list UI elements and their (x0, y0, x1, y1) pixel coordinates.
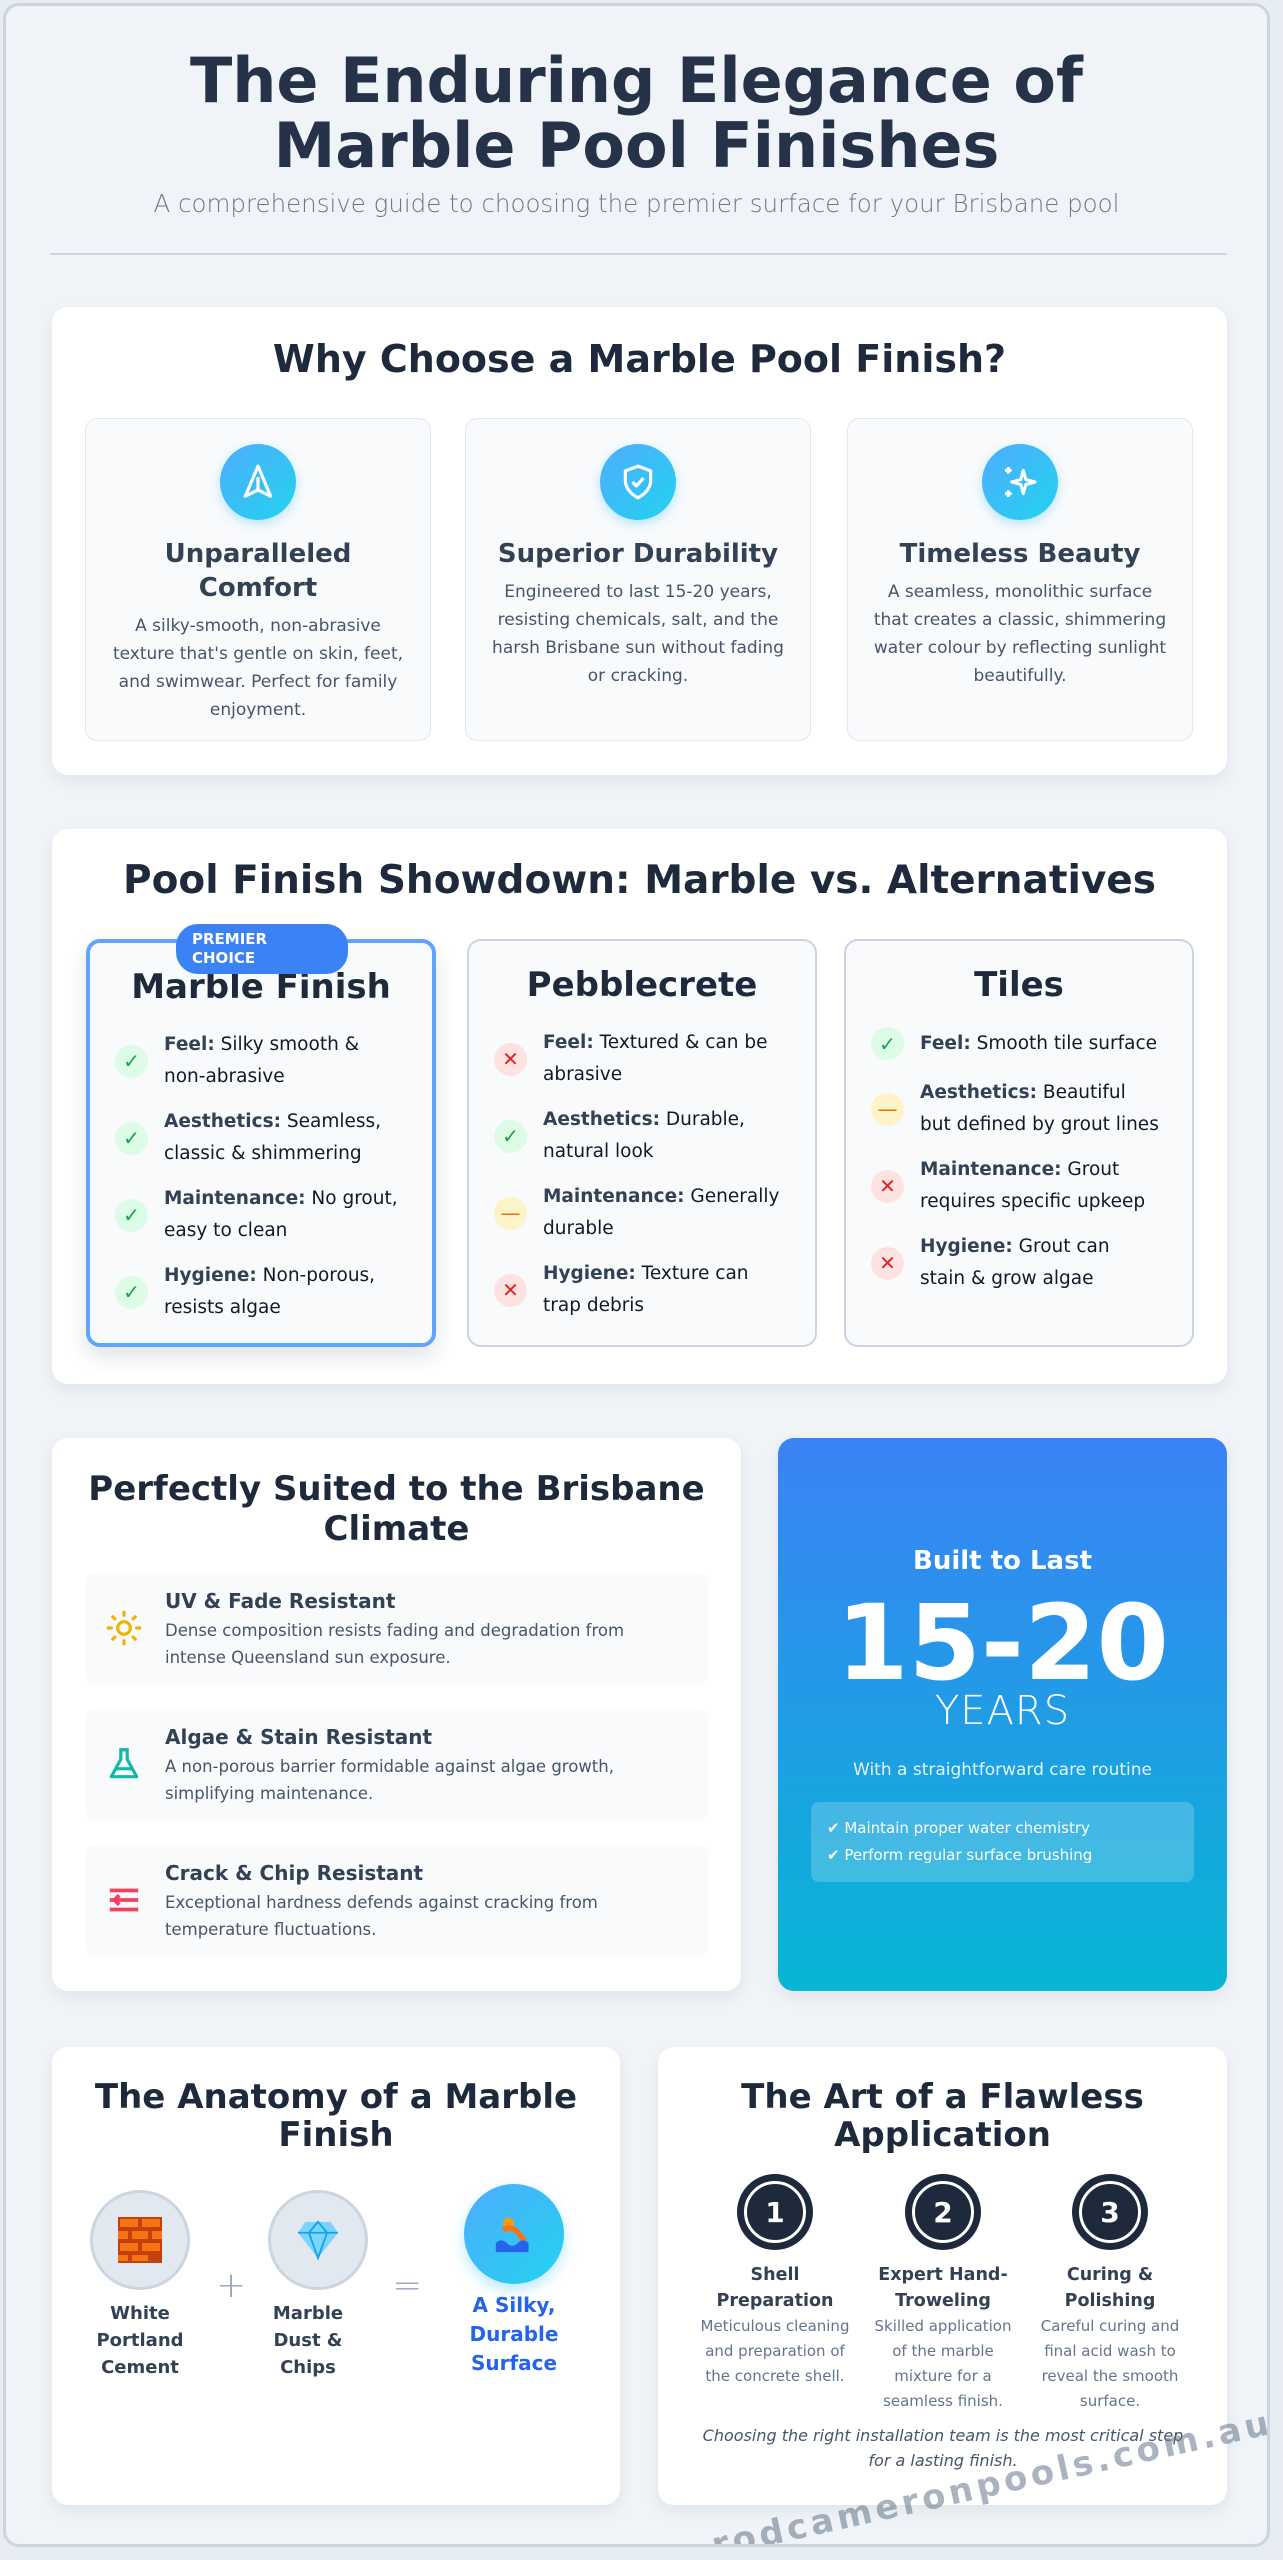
title: The Enduring Elegance of (190, 44, 1083, 117)
card: durability (465, 418, 811, 741)
heading: climate: Climate (324, 1509, 469, 1549)
operator: plus: + (216, 2265, 246, 2306)
column: pebblecrete: Aesthetics: Durable, natural look (543, 1109, 745, 1162)
icon: navigation (220, 444, 296, 520)
panel: built to last: YEARS (935, 1688, 1070, 1734)
column: marble: ✓ (123, 1049, 140, 1073)
panel: brisbane climate (52, 1438, 741, 1991)
box: care checklist (811, 1802, 1194, 1882)
column: tiles: Maintenance: Grout requires specific upkeep (920, 1159, 1145, 1212)
card: beauty (847, 418, 1193, 741)
step 3 (1041, 2174, 1179, 2410)
column: pebblecrete: Hygiene: Texture can trap debris (543, 1263, 749, 1316)
column: pebblecrete: Feel: Textured & can be abrasive (543, 1032, 768, 1085)
step 3: Curing & Polishing (1065, 2265, 1155, 2311)
box: care checklist: ✔ Perform regular surface brushing (827, 1846, 1092, 1864)
feature: algae: A non-porous barrier formidable against algae growth, simplifying maintenance. (165, 1757, 614, 1803)
badge: premier choice: CHOICE (192, 949, 255, 967)
column: tiles: — (878, 1097, 898, 1121)
feature: UV (85, 1573, 708, 1685)
feature: crack: Exceptional hardness defends against cracking from temperature fluctuations. (165, 1893, 598, 1939)
column: pebblecrete: ✓ (502, 1124, 519, 1148)
heading: application: The Art of a Flawless (741, 2077, 1144, 2117)
step 2: Skilled application of the marble mixture for a seamless finish. (874, 2317, 1011, 2410)
label: marble dust: Marble Dust & Chips (273, 2303, 343, 2378)
card: beauty: Timeless Beauty (900, 539, 1140, 569)
icon: flask (110, 1748, 138, 1778)
icon: layers (110, 1888, 138, 1912)
column: marble: Marble Finish (131, 967, 391, 1007)
column: pebblecrete: ✕ (502, 1278, 519, 1302)
column: pebblecrete (467, 939, 817, 1347)
card: durability: Engineered to last 15-20 years, resisting chemicals, salt, and the harsh Brisbane sun without fading or cracking. (492, 582, 784, 686)
label: result: A Silky, Durable Surface (470, 2293, 558, 2375)
card: comfort (85, 418, 431, 741)
circle: result surface (464, 2184, 564, 2284)
step 2: 2 (933, 2196, 953, 2228)
feature: UV: UV & Fade Resistant (165, 1589, 395, 1613)
badge: premier choice: PREMIER (192, 930, 267, 948)
subtitle: A comprehensive guide to choosing the premier surface for your Brisbane pool (154, 189, 1119, 218)
card: comfort: A silky-smooth, non-abrasive texture that's gentle on skin, feet, and swimwear. Perfect for family enjoyment. (113, 616, 403, 720)
step 3: 3 (1100, 2196, 1120, 2228)
title (190, 44, 1084, 182)
feature: crack: Crack & Chip Resistant (165, 1861, 423, 1885)
card: comfort: Unparalleled Comfort (165, 539, 351, 603)
panel: built to last (778, 1438, 1227, 1991)
column: tiles: ✕ (879, 1174, 896, 1198)
panel: application (658, 2047, 1227, 2505)
card: beauty: A seamless, monolithic surface that creates a classic, shimmering water colour by reflecting sunlight beautifully. (874, 582, 1166, 686)
badge: premier choice (176, 924, 348, 974)
heading: anatomy: Finish (278, 2115, 394, 2155)
circle: marble dust (268, 2190, 368, 2290)
step 1: 1 (765, 2196, 785, 2228)
step 2: Expert Hand-Troweling (878, 2265, 1008, 2311)
column: marble: Hygiene: Non-porous, resists algae (164, 1265, 375, 1318)
column: pebblecrete: Pebblecrete (527, 965, 757, 1005)
icon: sun (106, 1610, 142, 1646)
circle: cement (90, 2190, 190, 2290)
heading: why choose: Why Choose a Marble Pool Finish? (273, 337, 1006, 381)
column: marble: Maintenance: No grout, easy to clean (164, 1188, 398, 1241)
heading: anatomy: The Anatomy of a Marble (95, 2077, 577, 2117)
column: pebblecrete: ✕ (502, 1047, 519, 1071)
heading: anatomy (95, 2077, 577, 2155)
heading: climate (88, 1469, 705, 1549)
step 1 (701, 2174, 849, 2385)
column: marble: Feel: Silky smooth & non-abrasive (164, 1034, 359, 1087)
feature: algae: Algae & Stain Resistant (165, 1725, 432, 1749)
stat: 15-20 years: 15-20 (836, 1582, 1169, 1704)
column: pebblecrete: — (500, 1201, 520, 1225)
column: tiles: ✓ (879, 1032, 896, 1056)
panel: anatomy (52, 2047, 620, 2505)
step 1: Shell Preparation (717, 2265, 833, 2311)
box: care checklist: ✔ Maintain proper water chemistry (827, 1819, 1090, 1837)
heading: climate: Perfectly Suited to the Brisbane (88, 1469, 705, 1509)
label: built to last: Built to Last (913, 1546, 1092, 1576)
text: care routine: With a straightforward care routine (853, 1760, 1152, 1780)
heading: showdown: Pool Finish Showdown: Marble vs. Alternatives (123, 858, 1156, 903)
column: tiles: Hygiene: Grout can stain & grow algae (920, 1236, 1110, 1289)
feature: crack (85, 1845, 708, 1957)
title: Marble Pool Finishes (274, 109, 999, 182)
step 2 (874, 2174, 1011, 2410)
column: tiles: ✕ (879, 1251, 896, 1275)
column: tiles (844, 939, 1194, 1347)
icon: sparkles (982, 444, 1058, 520)
heading: application: Application (834, 2115, 1051, 2155)
column: marble: ✓ (123, 1203, 140, 1227)
heading: application (741, 2077, 1144, 2155)
icon: shield (600, 444, 676, 520)
feature: UV: Dense composition resists fading and degradation from intense Queensland sun exposure. (165, 1621, 624, 1667)
note: italic: Choosing the right installation team is the most critical step for a lasting finish. (703, 2426, 1183, 2470)
column: tiles: Feel: Smooth tile surface (920, 1032, 1157, 1054)
column: tiles: Aesthetics: Beautiful but defined by grout lines (920, 1082, 1159, 1135)
column: pebblecrete: Maintenance: Generally durable (543, 1186, 779, 1239)
card: durability: Superior Durability (498, 539, 778, 569)
operator: equals: = (392, 2265, 422, 2306)
column: marble: ✓ (123, 1280, 140, 1304)
column: marble: Aesthetics: Seamless, classic & shimmering (164, 1111, 381, 1164)
column: marble (86, 939, 436, 1347)
panel: showdown (52, 829, 1227, 1384)
feature: algae (85, 1709, 708, 1821)
column: marble: ✓ (123, 1126, 140, 1150)
step 3: Careful curing and final acid wash to reveal the smooth surface. (1041, 2317, 1179, 2410)
step 1: Meticulous cleaning and preparation of the concrete shell. (701, 2317, 849, 2385)
panel: why choose (52, 307, 1227, 775)
column: tiles: Tiles (974, 965, 1064, 1005)
label: cement: White Portland Cement (96, 2303, 184, 2378)
